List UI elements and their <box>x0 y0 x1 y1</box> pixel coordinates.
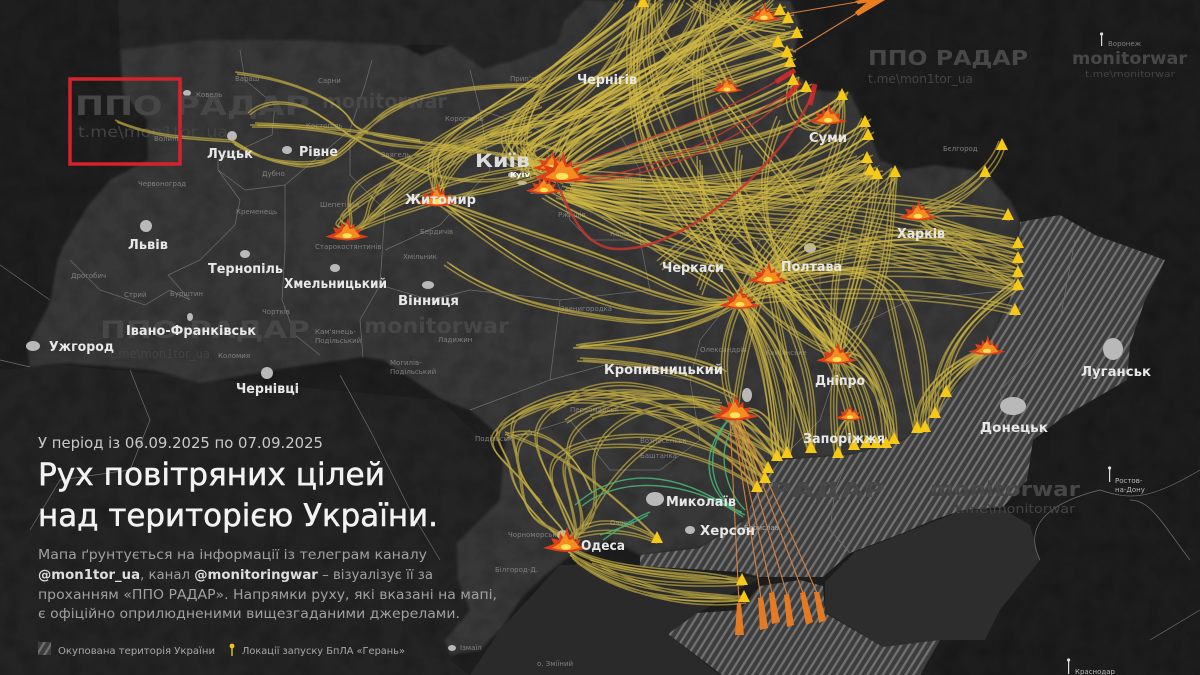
watermarks: ППО РАДАР <box>75 91 310 122</box>
city labels: Тернопіль <box>208 262 283 277</box>
city labels: Львів <box>128 238 168 253</box>
city labels: Суми <box>809 131 847 146</box>
city labels: Хмельницький <box>284 277 387 292</box>
small settlement labels: Бердичів <box>420 228 453 236</box>
small settlement labels: Звягель <box>381 151 410 159</box>
small settlement labels: Ржищів <box>558 211 586 219</box>
small settlement labels: Берислав <box>744 524 779 532</box>
city labels: Харків <box>897 227 945 242</box>
small settlement labels: Первомайськ <box>570 406 619 414</box>
location pins in Russia <box>1067 32 1111 674</box>
small settlement labels: Червоноград <box>138 180 186 188</box>
small settlement labels: Олександрія <box>700 346 747 354</box>
city labels: Запоріжжя <box>803 432 885 447</box>
small settlement labels: Звенигородка <box>560 305 612 313</box>
city labels: Чернігів <box>577 73 637 88</box>
small settlement labels: Ковель <box>196 91 222 99</box>
small settlement labels: Бєлгород <box>943 145 978 153</box>
city labels: Вінниця <box>398 294 459 309</box>
small settlement labels: Костопіль <box>306 122 343 130</box>
orange missile tracks <box>730 0 885 635</box>
black sea <box>470 565 760 675</box>
small settlement labels: Подільський <box>315 337 361 345</box>
small settlement labels: Чорноморськ <box>508 531 557 539</box>
legend: launch site pin <box>230 644 234 656</box>
small settlement labels: Подільський <box>390 368 436 376</box>
city labels: Полтава <box>781 260 842 275</box>
city labels: Івано-Франківськ <box>126 324 256 339</box>
title: Рух повітряних цілей <box>38 457 385 493</box>
city labels: Дніпро <box>815 374 865 389</box>
city labels: Миколаїв <box>666 495 736 510</box>
description text <box>38 547 497 622</box>
small settlement labels: Ладижин <box>438 336 472 344</box>
yellow flight paths: north-east to Kyiv <box>428 0 883 354</box>
city labels: Одеса <box>581 539 625 554</box>
watermarks: РАДАР <box>770 478 885 502</box>
city labels <box>49 73 1151 554</box>
description text: @mon1tor_ua, канал @monitoringwar – візуалізує її за <box>38 567 433 583</box>
small settlement labels: Стрий <box>124 291 147 299</box>
small settlement labels: Канів <box>610 230 630 238</box>
small settlement labels: Очаків <box>610 519 634 527</box>
small settlement labels: Дрогобич <box>71 272 106 280</box>
city labels: Чернівці <box>236 382 299 397</box>
small settlement labels: Воронеж <box>1108 40 1142 48</box>
small settlement labels: Баштанка <box>640 452 677 460</box>
city labels: Донецьк <box>980 421 1048 436</box>
city labels: Луганськ <box>1081 365 1151 380</box>
watermarks: t.me\mon1tor_ua <box>868 72 973 86</box>
legend: Окупована територія України <box>58 645 215 657</box>
watermarks <box>75 46 1188 516</box>
small settlement labels: Білгород-Д. <box>495 566 538 574</box>
watermarks: monitorwar <box>1072 49 1188 69</box>
description text: Мапа ґрунтується на інформації із телеграм каналу <box>38 547 427 563</box>
watermarks: t.me\monitorwar <box>955 502 1075 516</box>
description text: є офіційно оприлюдненими вищезгаданими джерелами. <box>38 606 460 622</box>
watermarks: monitorwar <box>930 477 1080 501</box>
sea of azov <box>825 510 1040 647</box>
small settlement labels: Васильків <box>530 188 566 196</box>
small settlement labels: Дубно <box>262 170 285 178</box>
title <box>38 457 438 534</box>
occupied territory: east and south <box>640 215 1165 577</box>
small settlement labels: Могилів- <box>390 359 422 367</box>
city labels: Черкаси <box>662 261 724 276</box>
small settlement labels: Коломия <box>218 352 250 360</box>
date line: У період із 06.09.2025 по 07.09.2025 <box>38 434 323 452</box>
red highlight box <box>70 79 180 164</box>
small settlement labels: Кременець <box>236 208 277 216</box>
small settlement labels: Подільськ <box>475 435 512 443</box>
city labels: Херсон <box>700 524 755 539</box>
small settlement labels: Бурштин <box>170 290 203 298</box>
city labels: Ужгород <box>49 340 114 355</box>
watermarks: t.me\monitorwar <box>1085 70 1175 80</box>
watermarks: t.me\mon1tor_ua <box>78 123 228 142</box>
small settlement labels: Вознесенськ <box>640 437 687 445</box>
watermarks: t.me\mon1tor_ua <box>110 347 210 361</box>
city labels: Київ <box>475 150 530 172</box>
yellow flight paths: Odesa and coast loops <box>491 382 789 605</box>
city labels: Kyiv <box>510 171 531 179</box>
legend: occupied territory swatch <box>38 642 51 655</box>
city blobs <box>26 90 1123 651</box>
watermarks: monitorwar <box>322 89 447 113</box>
small settlement labels: Сарни <box>318 77 341 85</box>
city labels: Рівне <box>299 145 338 160</box>
red flight paths <box>560 70 815 249</box>
small settlement labels: Старокостянтинів <box>315 243 381 251</box>
small settlement labels: Припʼять <box>510 75 543 83</box>
small settlement labels: Бровари <box>615 176 646 184</box>
watermarks: ППО РАДАР <box>100 316 310 344</box>
small settlement labels: Ізмаїл <box>460 644 482 652</box>
yellow flight paths: to the west <box>115 0 792 239</box>
green flight paths <box>575 416 745 540</box>
yellow flight paths: east to centre <box>557 91 1020 360</box>
small settlement labels: о. Зміїний <box>537 660 573 668</box>
explosions <box>325 3 1005 552</box>
city labels: Луцьк <box>207 147 253 162</box>
launch markers: border triangles <box>637 0 1024 602</box>
city labels: Житомир <box>405 193 476 208</box>
description text: проханням «ППО РАДАР». Напрямки руху, які вказані на мапі, <box>38 587 497 603</box>
watermarks: monitorwar <box>364 314 510 338</box>
small settlement labels: Коростень <box>445 115 484 123</box>
city labels: Кропивницький <box>604 363 723 378</box>
small settlement labels: на-Дону <box>1115 486 1145 494</box>
title: над територією України. <box>38 498 438 534</box>
legend: Локації запуску БпЛА «Герань» <box>242 645 405 657</box>
small settlement labels: Шепетівка <box>320 201 359 209</box>
yellow flight paths: south front <box>434 190 1021 490</box>
watermarks: ППО РАДАР <box>868 46 1028 70</box>
small settlement labels: Кам'янець- <box>315 328 356 336</box>
small settlement labels: Вараш <box>235 75 259 83</box>
occupied territory: Crimea <box>668 580 940 675</box>
small settlement labels: Хмільник <box>403 253 437 261</box>
legend <box>38 642 405 657</box>
small settlement labels: Волинь <box>154 135 181 143</box>
small settlement labels: Чортків <box>262 308 290 316</box>
small settlement labels: Ростов- <box>1115 477 1143 485</box>
small settlement labels: Кам'янське <box>765 349 807 357</box>
